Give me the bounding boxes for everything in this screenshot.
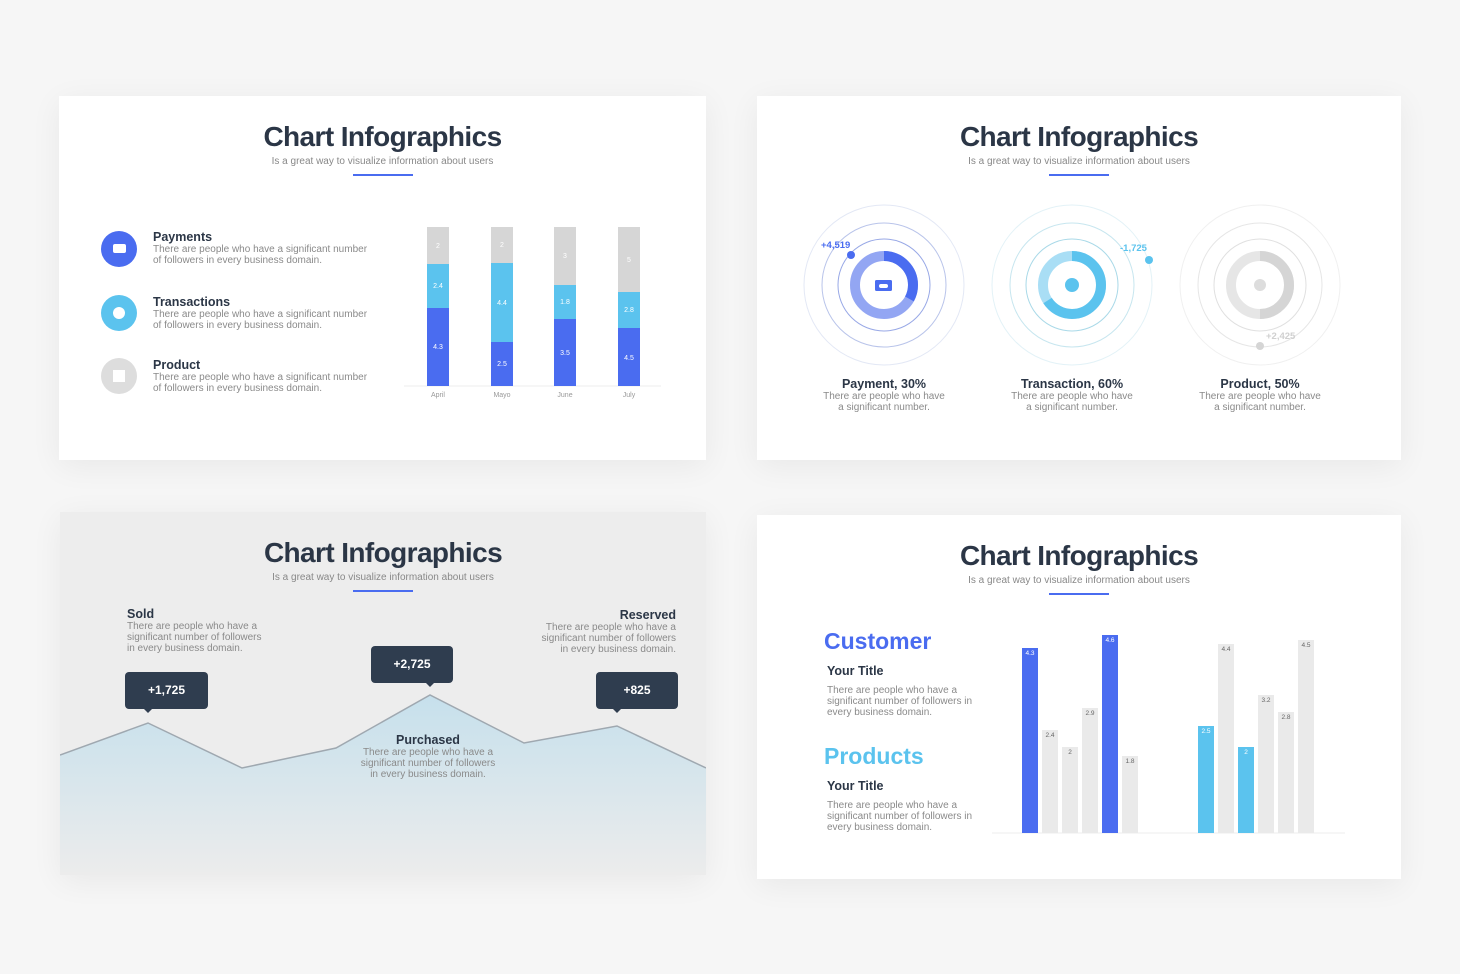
stacked bar chart: June	[557, 392, 573, 399]
radial chart group: +2,425	[1266, 331, 1296, 342]
item: transactions: of followers in every business domain.	[153, 320, 322, 331]
text: reserved: There are people who have a	[546, 622, 676, 633]
stacked bar chart: 4.3	[433, 344, 443, 351]
stacked bar chart: 1.8	[560, 299, 570, 306]
caption: product: a significant number.	[1214, 402, 1306, 413]
text: purchased: significant number of followers	[361, 758, 495, 769]
item: payments: Payments	[153, 230, 212, 244]
item: transactions	[153, 295, 367, 331]
stacked bar chart: 2.8	[624, 307, 634, 314]
text: products: significant number of followers in	[827, 811, 972, 822]
callout: +1,725	[125, 672, 208, 709]
item: product	[153, 358, 367, 394]
text: purchased	[361, 733, 495, 780]
text: purchased: in every business domain.	[370, 769, 486, 780]
panel: radial charts	[757, 96, 1401, 460]
bar chart: 3.2	[1261, 697, 1271, 704]
text: reserved: significant number of followers	[541, 633, 676, 644]
stacked bar chart	[404, 227, 661, 399]
subtitle: Is a great way to visualize information about users	[968, 575, 1190, 586]
item: product: There are people who have a significant number	[153, 372, 367, 383]
text: sold: There are people who have a	[127, 621, 257, 632]
panel: stacked bars	[59, 96, 706, 460]
area chart	[60, 694, 706, 842]
radial chart group: -1,725	[1120, 243, 1148, 254]
stacked bar chart: 2	[500, 242, 504, 249]
text: reserved: in every business domain.	[560, 644, 676, 655]
stacked bar chart: 2.4	[433, 283, 443, 290]
caption: transaction	[1011, 377, 1133, 413]
text: products: Your Title	[827, 779, 884, 793]
callout: +825: +825	[623, 683, 651, 697]
text: products	[824, 743, 972, 833]
stacked bar chart: 3	[563, 253, 567, 260]
caption: payment: a significant number.	[838, 402, 930, 413]
callout: +2,725	[371, 646, 453, 683]
stacked bar chart: Mayo	[493, 392, 511, 399]
item: transactions: There are people who have a significant number	[153, 309, 367, 320]
item: transactions: Transactions	[153, 295, 230, 309]
text: customer: Your Title	[827, 664, 884, 678]
bar chart: 2.4	[1045, 732, 1055, 739]
title: Chart Infographics	[960, 540, 1198, 571]
stacked bar chart: 5	[627, 257, 631, 264]
text: customer: significant number of followers in	[827, 696, 972, 707]
text: reserved	[541, 608, 676, 655]
item: payments: of followers in every business domain.	[153, 255, 322, 266]
item: product: Product	[153, 358, 200, 372]
bar chart: 4.4	[1221, 646, 1231, 653]
caption: transaction: There are people who have	[1011, 391, 1133, 402]
stacked bar chart: July	[623, 392, 636, 399]
text: sold	[127, 607, 262, 654]
icon: transactions	[101, 295, 137, 331]
text: sold: in every business domain.	[127, 643, 243, 654]
radial chart group	[804, 204, 1340, 366]
stacked bar chart: 2	[436, 243, 440, 250]
text: sold: Sold	[127, 607, 154, 621]
title: Chart Infographics	[264, 537, 502, 568]
text: sold: significant number of followers	[127, 632, 262, 643]
text: purchased: There are people who have a	[363, 747, 493, 758]
caption: product	[1199, 377, 1321, 413]
caption: transaction: Transaction, 60%	[1021, 377, 1123, 391]
callout: +825	[596, 672, 678, 709]
stacked bar chart: April	[431, 392, 445, 399]
text: customer: every business domain.	[827, 707, 932, 718]
stacked bar chart: 4.5	[624, 355, 634, 362]
bar chart: 2.5	[1201, 728, 1211, 735]
text: reserved: Reserved	[620, 608, 676, 622]
callout: +2,725: +2,725	[393, 657, 431, 671]
text: customer: Customer	[824, 628, 931, 654]
subtitle: Is a great way to visualize information about users	[272, 156, 493, 167]
text: customer: There are people who have a	[827, 685, 957, 696]
caption: transaction: a significant number.	[1026, 402, 1118, 413]
bar chart	[992, 635, 1345, 834]
panel: mountain chart	[60, 512, 706, 875]
text: products: Products	[824, 743, 924, 769]
caption: payment: There are people who have	[823, 391, 945, 402]
caption: product: There are people who have	[1199, 391, 1321, 402]
bar chart: 2.9	[1085, 710, 1095, 717]
legend list	[101, 230, 367, 394]
stacked bar chart: 3.5	[560, 350, 570, 357]
bar chart: 2.8	[1281, 714, 1291, 721]
text: customer	[824, 628, 972, 718]
item: payments: There are people who have a significant number	[153, 244, 367, 255]
icon: payments	[101, 231, 137, 267]
bar chart: 2	[1244, 749, 1248, 756]
text: products: There are people who have a	[827, 800, 957, 811]
item: product: of followers in every business domain.	[153, 383, 322, 394]
subtitle: Is a great way to visualize information about users	[272, 572, 494, 583]
text: products: every business domain.	[827, 822, 932, 833]
callout: +1,725: +1,725	[148, 683, 185, 697]
caption: payment	[823, 377, 945, 413]
title: Chart Infographics	[960, 121, 1198, 152]
bar chart: 4.5	[1301, 642, 1311, 649]
subtitle: Is a great way to visualize information about users	[968, 156, 1190, 167]
stacked bar chart: 4.4	[497, 300, 507, 307]
bar chart: 4.3	[1025, 650, 1035, 657]
text: purchased: Purchased	[396, 733, 460, 747]
bar chart: 1.8	[1125, 758, 1135, 765]
stacked bar chart: 2.5	[497, 361, 507, 368]
bar chart: 4.6	[1105, 637, 1115, 644]
caption: payment: Payment, 30%	[842, 377, 926, 391]
panel: grouped bars	[757, 515, 1401, 879]
title: Chart Infographics	[263, 121, 502, 152]
bar chart: 2	[1068, 749, 1072, 756]
item: payments	[153, 230, 367, 266]
icon: product	[101, 358, 137, 394]
caption: product: Product, 50%	[1220, 377, 1300, 391]
radial chart group: +4,519	[821, 240, 850, 251]
